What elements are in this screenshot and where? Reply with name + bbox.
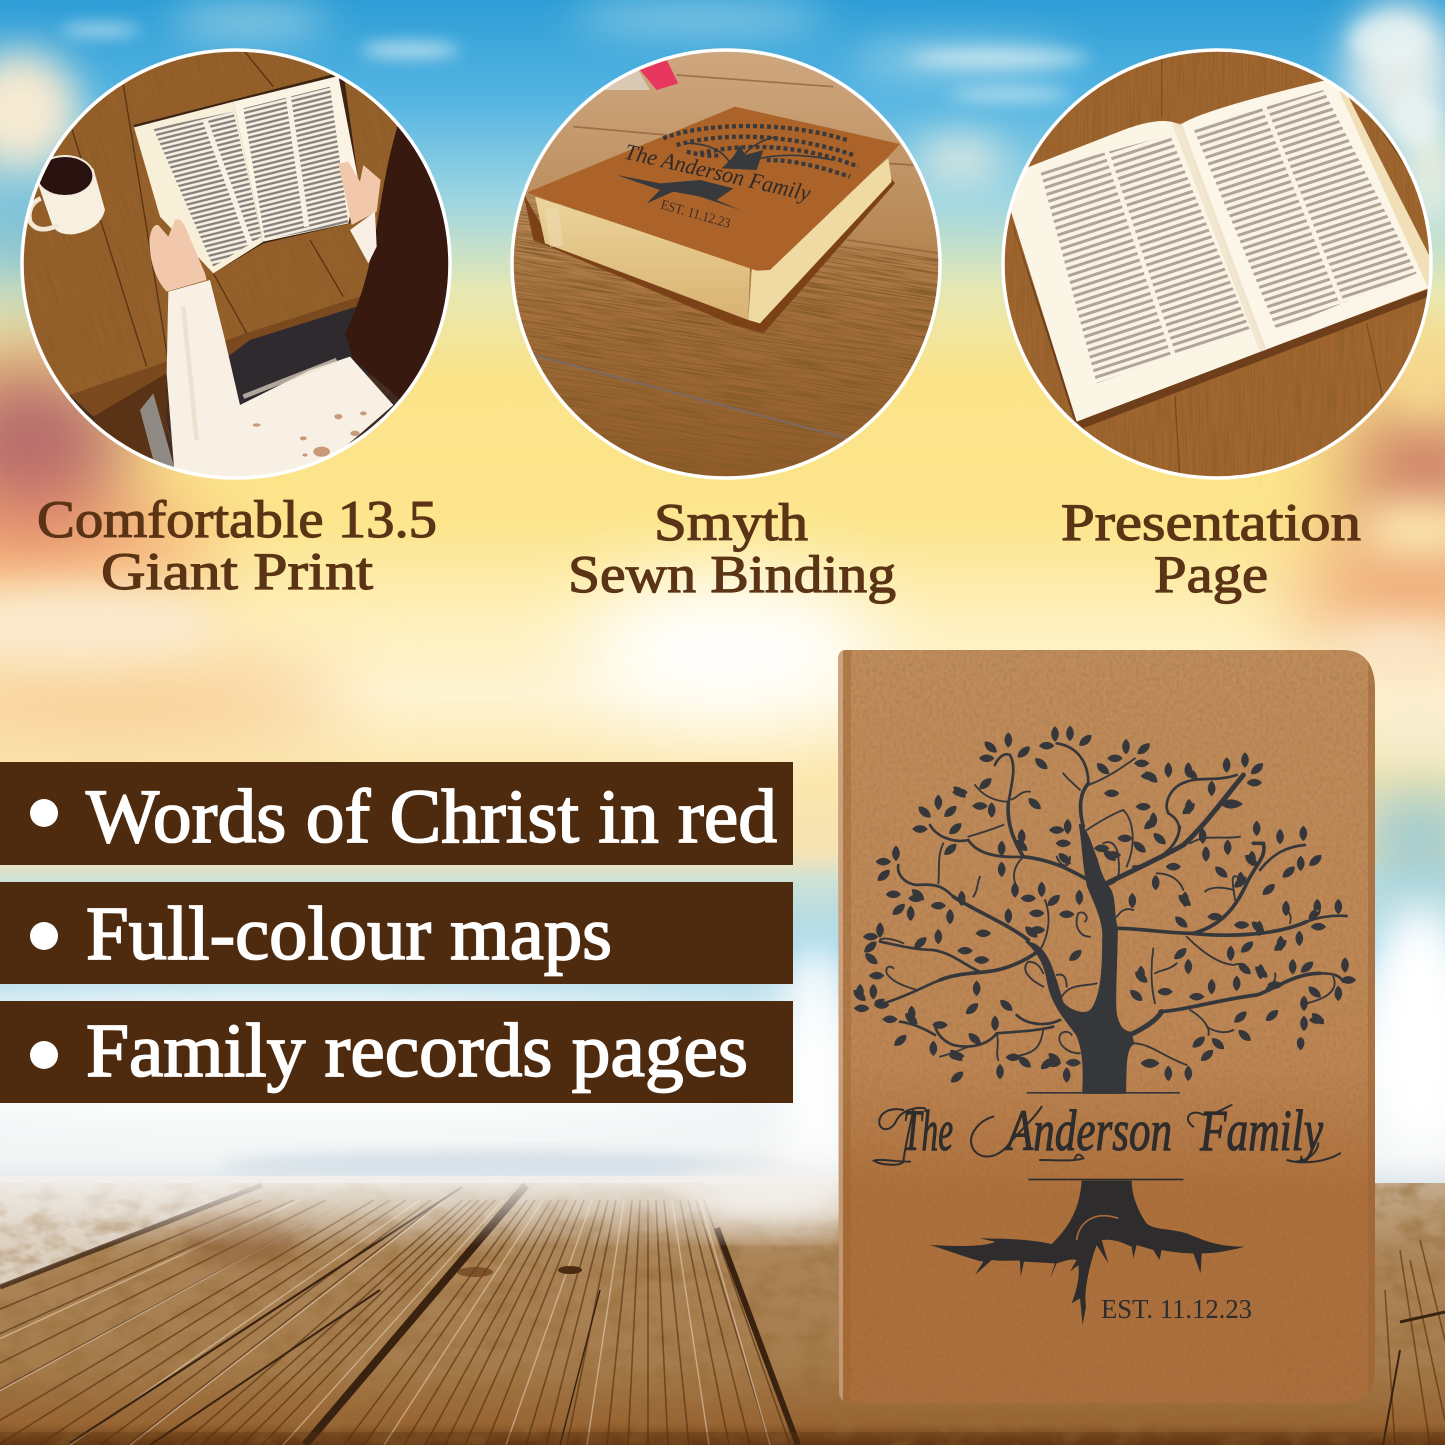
open book [134, 76, 358, 273]
caption: binding: Sewn Binding [568, 546, 896, 604]
photo circle: personalised leather Bible [510, 48, 942, 480]
sweater [167, 212, 393, 480]
open book pages [1010, 78, 1428, 422]
caption: binding [568, 494, 896, 604]
tree [854, 727, 1355, 1094]
hands [149, 162, 381, 292]
feature bar: maps: Full-colour maps [86, 892, 612, 976]
branches [876, 743, 1347, 1065]
book cover: EST. 11.12.23 [659, 198, 732, 232]
family name [874, 1098, 1340, 1165]
hair [345, 126, 448, 400]
tree roots [930, 1179, 1245, 1325]
trunk [1027, 825, 1133, 1093]
caption: presentation page [1061, 494, 1361, 604]
caption: giant print: Comfortable 13.5 [37, 491, 437, 549]
caption: giant print [37, 491, 437, 601]
caption: binding: Smyth [654, 494, 808, 552]
book cover [527, 107, 900, 271]
established date: EST. 11.12.23 [1101, 1294, 1252, 1324]
feature bar: family records [0, 1001, 793, 1103]
family name: The [903, 1098, 953, 1163]
caption: presentation page: Presentation [1061, 494, 1361, 552]
ground line [1027, 1092, 1180, 1094]
icon: coffee cup [29, 156, 105, 234]
feature bar: family records: Family records pages [86, 1009, 748, 1093]
photo circle: open Bible presentation page [990, 40, 1440, 490]
family name: Family [1199, 1098, 1323, 1163]
leaves [854, 727, 1355, 1082]
feature bar: maps [0, 882, 793, 984]
feature bar: words of Christ [0, 762, 793, 865]
book cover: The Anderson Family [622, 139, 814, 206]
family name: Anderson [1004, 1098, 1172, 1163]
feature bar: words of Christ: Words of Christ in red [86, 775, 777, 859]
photo circle: reading the giant print [20, 48, 452, 480]
caption: giant print: Giant Print [101, 543, 373, 601]
caption: presentation page: Page [1154, 546, 1268, 604]
rose [603, 60, 678, 90]
leather Bible cover [838, 650, 1375, 1403]
lower cover [523, 177, 895, 333]
wooden deck [0, 1167, 1445, 1445]
